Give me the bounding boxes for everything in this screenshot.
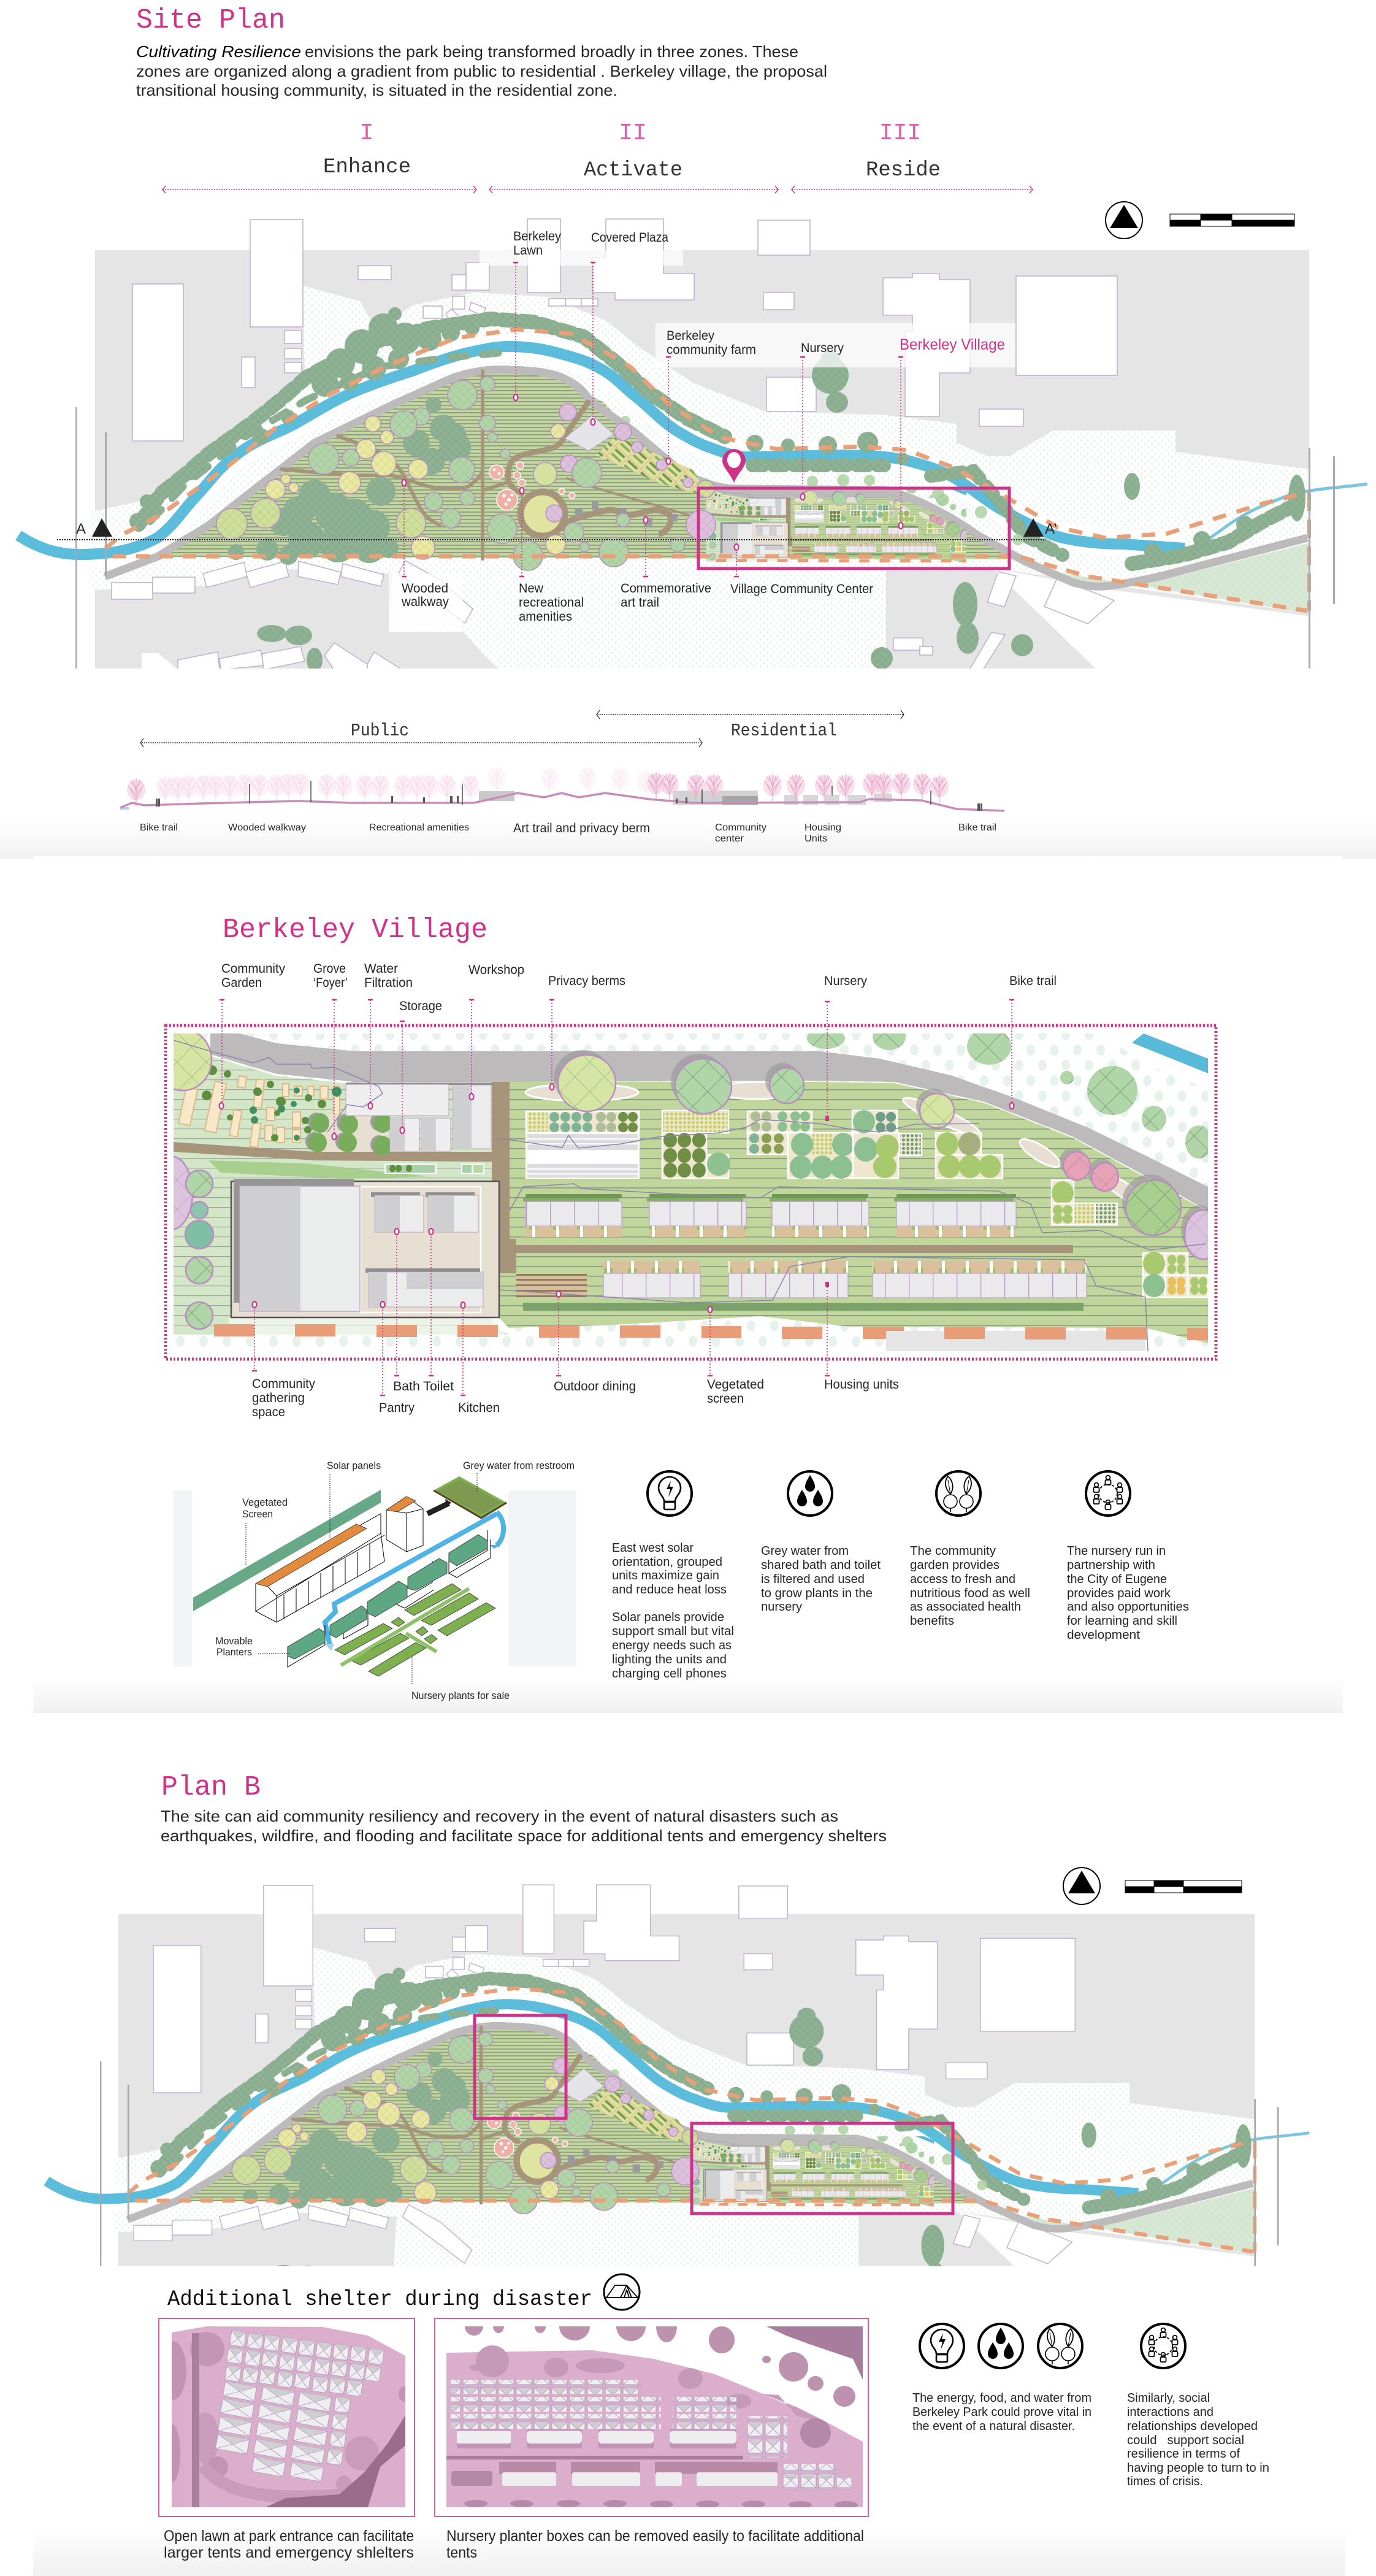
text block: work: for learning and skill	[1067, 1614, 1177, 1628]
text block: energy: and reduce heat loss	[612, 1583, 727, 1597]
title: Berkeley Village: Berkeley Village	[223, 914, 487, 946]
icon: community circle	[1141, 2324, 1185, 2368]
text block: energy: charging cell phones	[612, 1667, 727, 1681]
labels: isometric diagram: Planters	[216, 1646, 252, 1658]
leader lines: isometric diagram	[246, 1473, 477, 1684]
callouts: village plan labels: Pantry	[379, 1401, 415, 1415]
background: section three bottom fade	[33, 2525, 1345, 2576]
zone headings: numerals and names: II	[619, 120, 647, 147]
section labels: Recreational amenities	[369, 822, 469, 833]
icon: energy bulb	[648, 1471, 692, 1516]
callouts: village plan labels: Storage	[399, 999, 442, 1013]
callouts: village plan labels: Kitchen	[458, 1401, 500, 1415]
heading: additional shelter: Additional shelter during disaster	[167, 2287, 592, 2312]
icon: beets	[1038, 2324, 1082, 2368]
leader lines: site plan	[402, 263, 903, 577]
section extents: Public and Residential	[140, 710, 904, 747]
panel: lawn with larger tents	[159, 2318, 415, 2517]
callouts: site plan labels: amenities	[519, 610, 572, 624]
text block: energy: Solar panels provide	[612, 1611, 724, 1624]
text block: Plan B introduction	[161, 1807, 887, 1845]
icon: community circle	[1086, 1471, 1130, 1516]
zone headings: numerals and names: I	[360, 120, 373, 147]
section labels	[140, 821, 996, 844]
map: site plan	[0, 219, 1367, 675]
section labels: center	[715, 834, 744, 844]
text block: resources in disaster: the event of a natural disaster.	[912, 2420, 1075, 2433]
text block: social resilience	[1127, 2391, 1269, 2488]
text block: social resilience: interactions and	[1127, 2405, 1214, 2419]
callouts: village plan labels: Bath Toilet	[393, 1379, 454, 1393]
callouts: village plan labels	[221, 962, 1057, 1419]
callouts: village plan labels: Community	[252, 1377, 315, 1391]
callouts: site plan labels: Berkeley Village	[900, 336, 1005, 353]
callouts: site plan labels: community farm	[667, 343, 756, 357]
zone headings: numerals and names: Activate	[584, 159, 682, 182]
callouts: site plan labels: recreational	[519, 596, 584, 610]
section extents: Public and Residential: Residential	[731, 721, 837, 741]
text block: work: and also opportunities	[1067, 1600, 1189, 1614]
icon: north arrow	[1106, 202, 1142, 239]
section labels: Units	[805, 834, 827, 844]
icon: tent	[604, 2274, 640, 2310]
highlight: nursery tent area	[692, 2123, 953, 2214]
callouts: village plan labels: Outdoor dining	[554, 1379, 636, 1393]
text block: resources in disaster	[912, 2391, 1091, 2433]
text block: Plan B introduction: The site can aid community resiliency and recovery in the event of natural disasters such as	[161, 1807, 838, 1825]
text block: energy: lighting the units and	[612, 1653, 727, 1666]
leader lines: village plan	[220, 1000, 1014, 1395]
map: Plan B site plan	[44, 1884, 1310, 2266]
callouts: village plan labels: Water	[364, 962, 398, 976]
callouts: village plan labels: screen	[707, 1392, 744, 1406]
callouts: village plan labels: space	[252, 1405, 285, 1419]
text block: energy: East west solar	[612, 1541, 694, 1555]
zone headings: numerals and names: III	[879, 120, 921, 147]
text block: social resilience: Similarly, social	[1127, 2391, 1210, 2405]
text block: food: nutritious food as well	[910, 1587, 1030, 1600]
text block: resources in disaster: The energy, food, and water from	[912, 2391, 1091, 2405]
text block: work: the City of Eugene	[1067, 1573, 1167, 1586]
caption: nursery tents	[446, 2528, 864, 2561]
callouts: site plan labels: Covered Plaza	[591, 231, 668, 245]
callouts: site plan labels: Wooded	[402, 581, 448, 596]
text block: work: development	[1067, 1628, 1140, 1642]
caption: lawn tents: larger tents and emergency shlelters	[164, 2544, 414, 2561]
section extents: Public and Residential: Public	[351, 721, 409, 741]
callouts: site plan labels: Nursery	[801, 341, 844, 355]
text block: site plan introduction: Cultivating Resilience	[136, 42, 301, 61]
section cut line A to A': A’	[1045, 521, 1057, 537]
labels: isometric diagram: Solar panels	[327, 1460, 381, 1471]
labels: isometric diagram: Nursery plants for sale	[411, 1690, 510, 1701]
icon: north arrow	[1063, 1868, 1100, 1904]
icon: water drops	[788, 1471, 832, 1516]
text block: water: nursery	[761, 1600, 802, 1614]
text block: social resilience: relationships developed	[1127, 2420, 1258, 2433]
callouts: site plan labels	[401, 229, 1005, 624]
callouts: village plan labels: Filtration	[364, 976, 413, 990]
section cut line A to A'	[57, 518, 1057, 540]
frame: village plan dotted border	[166, 1025, 1216, 1359]
callouts: village plan labels: gathering	[252, 1391, 305, 1405]
text block: water	[761, 1544, 881, 1614]
scale bar	[1125, 1880, 1242, 1893]
title: Plan B: Plan B	[161, 1772, 261, 1803]
callouts: village plan labels: Grove	[313, 962, 346, 976]
text block: food: benefits	[910, 1614, 954, 1628]
text block: energy: orientation, grouped	[612, 1555, 722, 1569]
title: Site Plan: Site Plan	[136, 5, 285, 36]
caption: nursery tents: tents	[446, 2544, 477, 2561]
callouts: site plan labels: Village Community Center	[730, 582, 873, 596]
background: section one bottom fade	[0, 822, 1376, 859]
text block: energy: units maximize gain	[612, 1569, 719, 1582]
icon: energy bulb	[920, 2324, 964, 2368]
zone headings: numerals and names	[323, 120, 941, 182]
callouts: village plan labels: Garden	[221, 976, 262, 990]
callouts: village plan labels: Housing units	[824, 1378, 899, 1392]
text block: social resilience: having people to turn to in	[1127, 2461, 1269, 2475]
text block: food: access to fresh and	[910, 1573, 1015, 1586]
caption: lawn tents: Open lawn at park entrance can facilitate	[164, 2528, 414, 2545]
text block: water: is filtered and used	[761, 1573, 865, 1586]
callouts: site plan labels: Commemorative	[621, 581, 711, 596]
text block: site plan introduction: zones are organized along a gradient from public to residential . Berkeley village, the proposal	[136, 62, 827, 80]
icon: beets	[936, 1471, 980, 1516]
text block: energy: energy needs such as	[612, 1639, 732, 1652]
text block: food: garden provides	[910, 1558, 1000, 1572]
section labels: Wooded walkway	[228, 822, 306, 833]
section labels: Bike trail	[958, 822, 996, 833]
callouts: village plan labels: Workshop	[468, 963, 524, 977]
callouts: village plan labels: Vegetated	[707, 1378, 764, 1392]
labels: isometric diagram: Vegetated	[242, 1497, 288, 1508]
arrows: zone extents	[162, 186, 1033, 193]
callouts: site plan labels: Berkeley	[513, 229, 561, 243]
labels: isometric diagram: Grey water from restroom	[463, 1460, 575, 1471]
labels: isometric diagram	[215, 1460, 575, 1701]
text block: Plan B introduction: earthquakes, wildfire, and flooding and facilitate space for additional tents and emergency shelters	[161, 1827, 887, 1845]
text block: resources in disaster: Berkeley Park could prove vital in	[912, 2405, 1091, 2419]
chart: site section A-A'	[120, 767, 1004, 811]
map: Berkeley Village plan	[150, 1023, 1221, 1351]
highlight: lawn tent area	[475, 2015, 566, 2118]
panel: nursery with tents between housing	[435, 2310, 868, 2517]
callouts: site plan labels: Berkeley	[667, 329, 714, 343]
text block: work: partnership with	[1067, 1558, 1155, 1572]
caption: lawn tents	[164, 2528, 414, 2561]
callouts: site plan labels: Lawn	[513, 243, 543, 258]
highlight: Berkeley Village extent	[698, 488, 1009, 569]
callouts: village plan labels: Bike trail	[1009, 974, 1057, 988]
caption: nursery tents: Nursery planter boxes can be removed easily to facilitate additional	[446, 2528, 864, 2545]
text block: work	[1067, 1544, 1189, 1642]
scale bar	[1170, 214, 1294, 226]
callouts: site plan labels: art trail	[621, 596, 659, 610]
section labels: Housing	[805, 822, 841, 833]
section labels: Community	[715, 822, 766, 833]
callouts: village plan labels: Nursery	[824, 974, 867, 988]
zone headings: numerals and names: Reside	[866, 159, 941, 182]
text block: food: The community	[910, 1544, 996, 1558]
labels: isometric diagram: Screen	[242, 1508, 273, 1520]
text block: energy	[612, 1541, 734, 1681]
text block: site plan introduction: transitional housing community, is situated in the residential zone.	[136, 81, 617, 99]
text block: work: provides paid work	[1067, 1587, 1171, 1600]
text block: water: Grey water from	[761, 1544, 849, 1558]
section cut line A to A': A	[76, 521, 86, 537]
text block: food	[910, 1544, 1030, 1628]
text block: social resilience: could support social	[1127, 2434, 1244, 2447]
label backings: translucent bands behind callouts	[389, 250, 1015, 632]
section labels: Bike trail	[140, 822, 178, 833]
labels: isometric diagram: Movable	[215, 1635, 253, 1647]
text block: water: shared bath and toilet	[761, 1558, 881, 1572]
callouts: village plan labels: ‘Foyer’	[313, 976, 348, 990]
text block: social resilience: times of crisis.	[1127, 2475, 1203, 2488]
callouts: village plan labels: Privacy berms	[548, 974, 625, 988]
text block: water: to grow plants in the	[761, 1587, 873, 1600]
text block: food: as associated health	[910, 1600, 1021, 1614]
icon: water drops	[979, 2324, 1023, 2368]
callouts: site plan labels: New	[519, 581, 544, 596]
text block: site plan introduction	[136, 42, 827, 99]
text block: energy: support small but vital	[612, 1625, 734, 1638]
callouts: village plan labels: Community	[221, 962, 285, 976]
panel: Berkeley Village	[33, 856, 1343, 1713]
section labels: Art trail and privacy berm	[513, 821, 650, 835]
text block: site plan introduction: envisions the park being transformed broadly in three zones. These	[305, 42, 798, 61]
text block: work: The nursery run in	[1067, 1544, 1166, 1558]
zone headings: numerals and names: Enhance	[323, 156, 411, 179]
text block: social resilience: resilience in terms of	[1127, 2447, 1240, 2461]
marker: village location pin	[722, 449, 746, 483]
callouts: site plan labels: walkway	[401, 595, 449, 609]
diagram: isometric housing exploded view	[174, 1476, 576, 1676]
